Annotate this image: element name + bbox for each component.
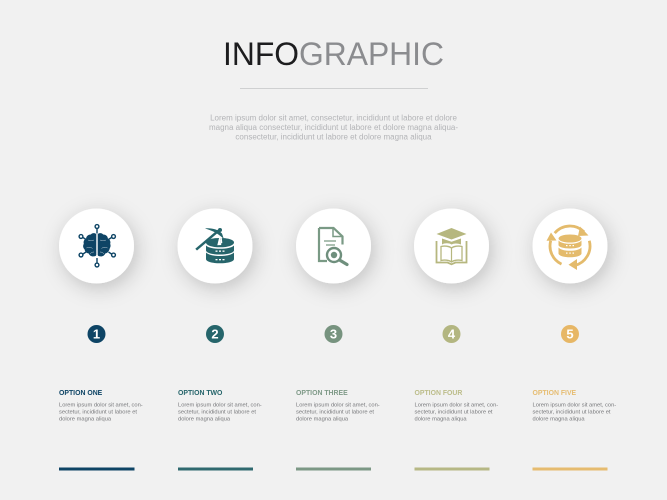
option four text: Lorem ipsum dolor sit amet, con- bbox=[414, 402, 498, 408]
icon: graduation cap on book bbox=[436, 228, 466, 264]
title: INFOGRAPHIC bbox=[223, 36, 444, 72]
number badge one: 1 bbox=[93, 327, 100, 342]
option three text bbox=[296, 390, 380, 422]
option one text: OPTION ONE bbox=[59, 390, 103, 397]
number badge three: 3 bbox=[330, 327, 337, 342]
intro text: consectetur, incididunt ut labore et dolore magna aliqua bbox=[235, 133, 432, 142]
option one text: dolore magna aliqua bbox=[59, 416, 112, 422]
option two text: sectetur, incididunt ut labore et bbox=[178, 409, 256, 415]
bar five bbox=[532, 468, 608, 470]
number badge two: 2 bbox=[211, 327, 219, 342]
intro text: magna aliqua consectetur, incididunt ut labore et dolore magna aliqua- bbox=[209, 123, 458, 132]
panel: option two bbox=[178, 208, 262, 470]
option five text: sectetur, incididunt ut labore et bbox=[532, 409, 611, 415]
number badge two bbox=[206, 325, 224, 343]
option three text: dolore magna aliqua bbox=[296, 416, 349, 422]
option two text: Lorem ipsum dolor sit amet, con- bbox=[178, 402, 262, 408]
bar three bbox=[296, 468, 371, 470]
option four text: dolore magna aliqua bbox=[414, 416, 467, 422]
option two text bbox=[178, 390, 262, 422]
number badge three bbox=[324, 325, 342, 343]
icon circle one bbox=[59, 208, 134, 284]
option three text: OPTION THREE bbox=[296, 390, 348, 397]
bar one bbox=[59, 468, 134, 470]
panel: option five bbox=[532, 208, 616, 470]
panel: option three bbox=[296, 208, 380, 470]
option two text: dolore magna aliqua bbox=[178, 416, 231, 422]
number badge five: 5 bbox=[566, 327, 574, 342]
option five text: dolore magna aliqua bbox=[532, 416, 585, 422]
option four text: OPTION FOUR bbox=[414, 390, 462, 397]
icon: document search bbox=[319, 228, 347, 264]
option five text: OPTION FIVE bbox=[532, 390, 577, 397]
number badge four: 4 bbox=[448, 327, 456, 342]
icon circle five bbox=[532, 208, 608, 284]
intro text bbox=[209, 113, 458, 142]
option two text: OPTION TWO bbox=[178, 390, 223, 397]
number badge five bbox=[561, 325, 579, 343]
bar two bbox=[178, 468, 253, 470]
number badge four bbox=[442, 325, 460, 343]
option one text: sectetur, incididunt ut labore et bbox=[59, 409, 137, 415]
option three text: sectetur, incididunt ut labore et bbox=[296, 409, 374, 415]
option three text: Lorem ipsum dolor sit amet, con- bbox=[296, 402, 380, 408]
intro text: Lorem ipsum dolor sit amet, consectetur, incididunt ut labore et dolore bbox=[210, 113, 457, 122]
option four text bbox=[414, 390, 498, 422]
option one text bbox=[59, 390, 143, 422]
icon circle three bbox=[296, 208, 371, 284]
option one text: Lorem ipsum dolor sit amet, con- bbox=[59, 402, 143, 408]
icon circle two bbox=[178, 208, 252, 284]
number badge one bbox=[88, 325, 106, 343]
panel: option four bbox=[414, 208, 498, 470]
panel: option one bbox=[59, 208, 143, 470]
icon: database sync bbox=[546, 226, 590, 270]
option four text: sectetur, incididunt ut labore et bbox=[414, 409, 493, 415]
icon: brain bbox=[79, 225, 115, 267]
icon circle four bbox=[414, 208, 489, 284]
option five text: Lorem ipsum dolor sit amet, con- bbox=[532, 402, 616, 408]
icon: data mining pickaxe bbox=[195, 228, 234, 263]
bar four bbox=[414, 468, 490, 470]
option five text bbox=[532, 390, 616, 422]
